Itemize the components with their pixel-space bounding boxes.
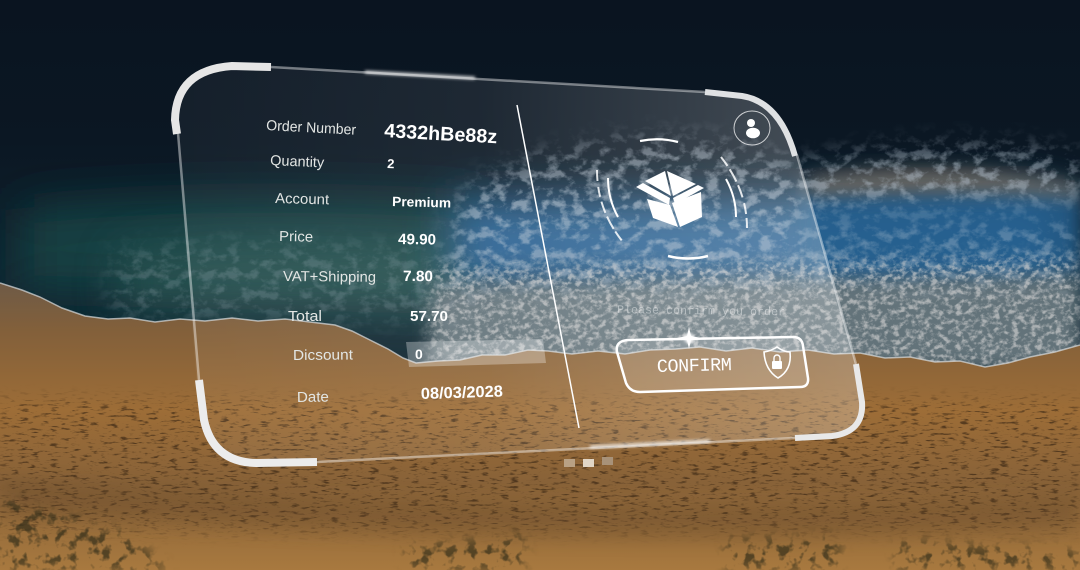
order field labels: Quantity [270, 153, 325, 171]
panel: top corner bracket right [705, 92, 795, 156]
order field values: 0 [415, 346, 423, 362]
panel: bottom corner bracket right [795, 364, 862, 438]
panel: glass surface [176, 66, 863, 465]
dune vegetation [0, 495, 1080, 570]
panel: bottom corner bracket left [199, 380, 317, 463]
confirm button: CONFIRM [657, 355, 732, 378]
order field values [384, 120, 503, 403]
shoreline foam edge [0, 283, 1080, 367]
icon: shield with padlock [764, 347, 790, 378]
confirmation prompt: Please confirm you order [617, 304, 785, 319]
icon: open box [636, 171, 704, 227]
order field values: 08/03/2028 [421, 383, 503, 403]
order field values: 7.80 [403, 268, 433, 285]
order field values: Premium [392, 194, 451, 211]
order field labels [266, 118, 376, 406]
sand footprints [0, 400, 1080, 530]
confirm button [617, 337, 808, 392]
order field labels: Account [275, 191, 329, 208]
panel: thin edge lines [178, 67, 856, 462]
icon: user profile [734, 111, 770, 145]
icon: circular progress arcs [597, 139, 747, 258]
order field labels: Price [279, 229, 313, 246]
small reflection squares [564, 457, 613, 467]
discount input highlight [406, 339, 546, 367]
bottom edge glint [590, 441, 710, 447]
glass order panel [175, 66, 863, 465]
order field values: 4332hBe88z [384, 120, 498, 148]
order field labels: Dicsount [293, 347, 353, 364]
panel: top corner bracket left [175, 66, 271, 134]
sparkle on button edge [677, 327, 701, 349]
order field values: 57.70 [410, 308, 448, 325]
order field values: 49.90 [398, 231, 436, 249]
order field labels: Date [297, 389, 329, 406]
order field values: 2 [387, 156, 395, 171]
dark sand band [0, 480, 1080, 539]
order field labels: Total [288, 309, 322, 325]
top edge glint [365, 72, 475, 78]
sand [0, 283, 1080, 570]
order field labels: VAT+Shipping [283, 269, 376, 286]
order field labels: Order Number [266, 118, 357, 139]
divider line [517, 105, 579, 428]
